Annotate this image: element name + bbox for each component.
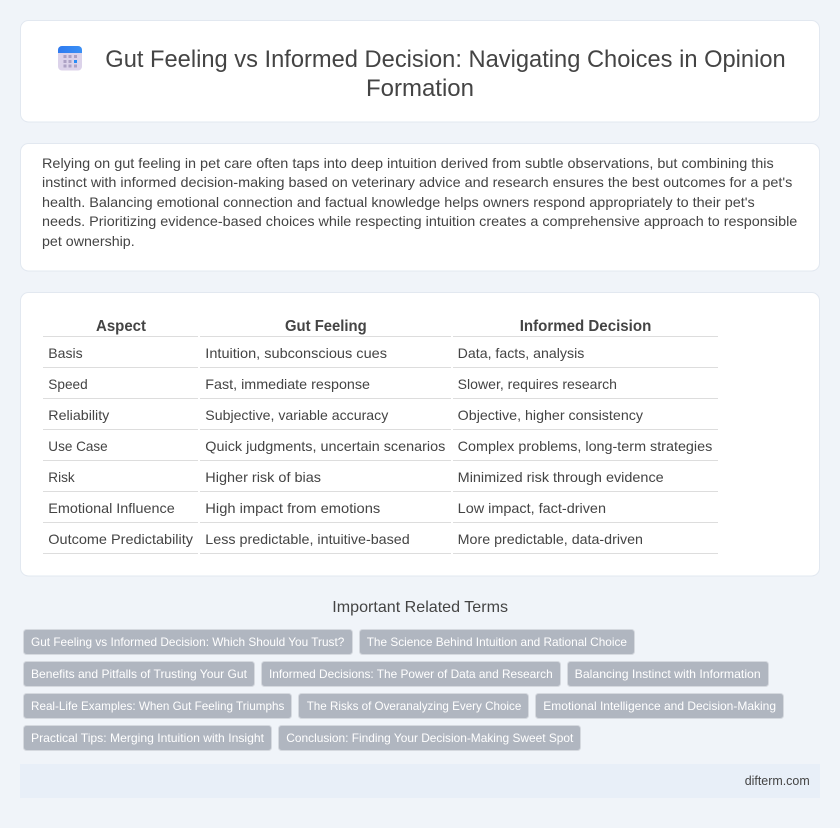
chip: Benefits and Pitfalls of Trusting Your Gut [31, 667, 248, 681]
table row: emotional influence: Emotional Influence [48, 500, 175, 516]
table row: speed: Slower, requires research [458, 376, 617, 392]
chip [298, 694, 528, 718]
table row: basis: Intuition, subconscious cues [205, 345, 387, 361]
table row: speed: Fast, immediate response [205, 376, 370, 392]
table row: outcome predictability: Less predictable, intuitive-based [205, 531, 410, 547]
title [105, 46, 786, 102]
table row: basis: Data, facts, analysis [458, 345, 584, 361]
table row: use case: Quick judgments, uncertain scenarios [205, 438, 445, 454]
footer: difterm.com [745, 773, 810, 788]
chip [24, 662, 254, 686]
title: Gut Feeling vs Informed Decision: Navigating Choices in Opinion [105, 46, 786, 73]
table row: emotional influence: Low impact, fact-driven [458, 500, 606, 516]
panel: comparison table [20, 292, 820, 576]
table row: risk [48, 469, 664, 485]
table row: outcome predictability: More predictable, data-driven [458, 531, 643, 547]
title: Formation [366, 75, 474, 102]
icon: calendar [58, 46, 82, 70]
table row: outcome predictability [48, 531, 643, 547]
table row: reliability [48, 407, 643, 423]
table row: use case: Complex problems, long-term strategies [458, 438, 712, 454]
text block: summary: health. Balancing emotional connection and factual knowledge helps owners respond appropriately to their pet's [42, 194, 755, 210]
chip [24, 694, 292, 718]
text block: summary: Relying on gut feeling in pet care often taps into deep intuition derived from subtle observations, but combining this [42, 155, 774, 171]
chip: Informed Decisions: The Power of Data and Research [269, 667, 553, 681]
table row: speed: Speed [48, 376, 88, 392]
text block: summary: instinct with informed decision-making based on veterinary advice and research ensures the best outcomes for a pet's [42, 174, 792, 190]
table header [96, 318, 651, 335]
chip: Practical Tips: Merging Intuition with Insight [31, 731, 265, 745]
table header: Gut Feeling [285, 318, 367, 335]
chip [568, 662, 768, 686]
chip [278, 726, 580, 750]
table row: emotional influence [48, 500, 606, 516]
table row: reliability: Reliability [48, 407, 109, 423]
footer [20, 764, 820, 798]
table row: use case: Use Case [48, 438, 108, 454]
heading: related terms: Important Related Terms [332, 599, 508, 616]
chip: Gut Feeling vs Informed Decision: Which Should You Trust? [31, 635, 345, 649]
table row: basis [48, 345, 584, 361]
chip: Emotional Intelligence and Decision-Making [543, 699, 776, 713]
panel: related term chips [24, 630, 784, 750]
text block: summary: needs. Prioritizing evidence-based choices while respecting intuition creates a comprehensive approach to responsible [42, 213, 798, 229]
chip: Real-Life Examples: When Gut Feeling Triumphs [31, 699, 284, 713]
chip [536, 694, 784, 718]
table row: emotional influence: High impact from emotions [205, 500, 380, 516]
chip: The Risks of Overanalyzing Every Choice [307, 699, 522, 713]
table header: Aspect [96, 318, 147, 335]
chip [360, 630, 634, 654]
panel: title card [20, 20, 820, 122]
text block: summary: pet ownership. [42, 233, 135, 249]
table row: basis: Basis [48, 345, 83, 361]
table row: risk: Higher risk of bias [205, 469, 321, 485]
table row: risk: Risk [48, 469, 76, 485]
table row: outcome predictability: Outcome Predictability [48, 531, 193, 547]
table row: speed [48, 376, 617, 392]
table row: reliability: Subjective, variable accuracy [205, 407, 388, 423]
chip: Conclusion: Finding Your Decision-Making Sweet Spot [286, 731, 574, 745]
chip [24, 726, 272, 750]
table row: risk: Minimized risk through evidence [458, 469, 664, 485]
text block: summary [42, 155, 798, 249]
table row: reliability: Objective, higher consistency [458, 407, 643, 423]
chip: The Science Behind Intuition and Rational Choice [367, 635, 627, 649]
chip [262, 662, 560, 686]
table header: Informed Decision [520, 318, 651, 335]
panel: summary paragraph [20, 144, 820, 271]
table row: use case [48, 438, 712, 454]
chip: Balancing Instinct with Information [575, 667, 761, 681]
chip [24, 630, 352, 654]
